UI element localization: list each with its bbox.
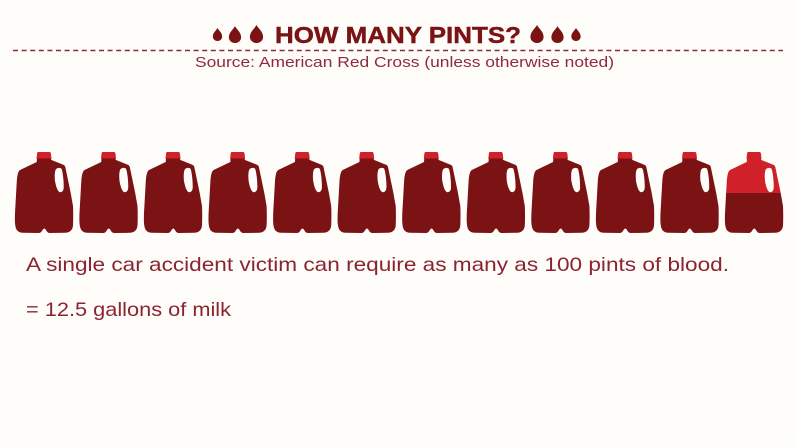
jug 5 <box>273 152 331 233</box>
infographic canvas <box>13 25 784 320</box>
jug 1 <box>15 152 73 233</box>
icon: left blood drops <box>213 25 263 43</box>
source line: Source: American Red Cross (unless otherwise noted) <box>195 54 614 71</box>
jug 8 <box>467 152 525 233</box>
statement text: A single car accident victim can require as many as 100 pints of blood. <box>26 254 729 276</box>
heading text: HOW MANY PINTS? <box>275 22 521 48</box>
jug 9 <box>531 152 590 233</box>
jug 6 <box>338 152 396 233</box>
jug 12: half filled <box>725 152 783 233</box>
jug 7 <box>402 152 461 233</box>
jug 10 <box>596 152 654 233</box>
jug 3 <box>144 152 202 233</box>
jug 4 <box>208 152 267 233</box>
gallons equivalence text: = 12.5 gallons of milk <box>26 299 231 321</box>
milk jug row <box>15 152 783 233</box>
jug 11 <box>660 152 719 233</box>
icon: right blood drops <box>530 25 581 43</box>
jug 2 <box>79 152 138 233</box>
title <box>213 22 581 48</box>
